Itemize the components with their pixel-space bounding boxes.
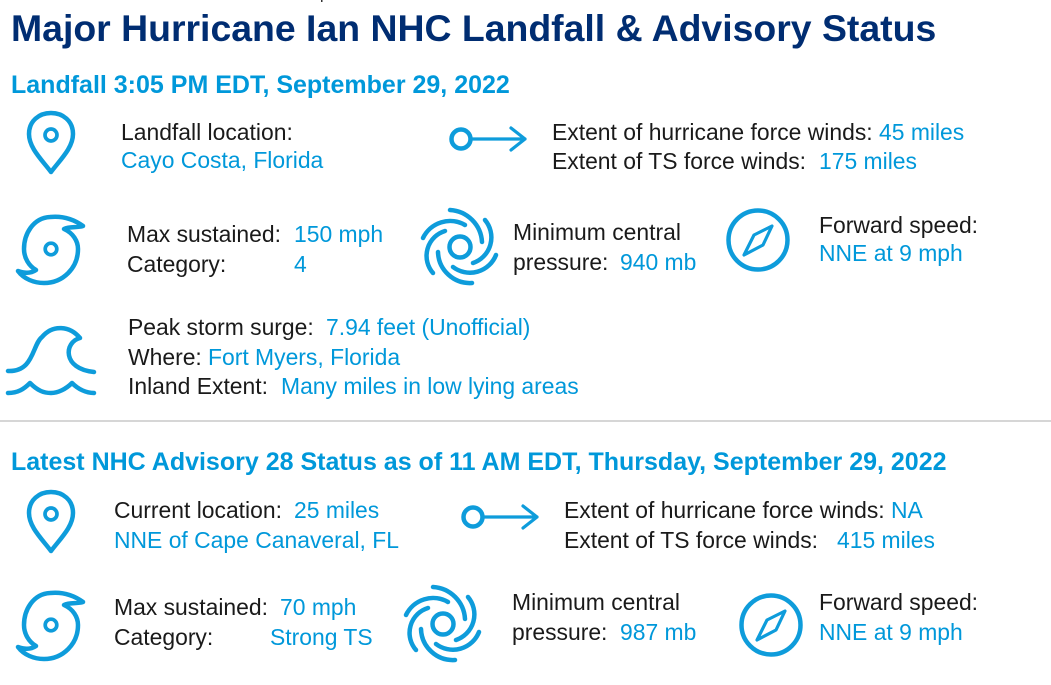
heading: landfall time: Landfall 3:05 PM EDT, September 29, 2022: [11, 71, 510, 99]
text: wind extents: Extent of hurricane force winds:: [552, 119, 873, 145]
text: current location: [114, 497, 399, 553]
text: forward speed: Forward speed:: [819, 212, 978, 238]
text: storm surge: [128, 314, 579, 399]
text: minimum central pressure: pressure:: [513, 249, 608, 275]
heading: advisory status: Latest NHC Advisory 28 Status as of 11 AM EDT, Thursday, September 29, 2022: [11, 448, 947, 476]
icon: storm surge wave: [8, 328, 94, 393]
text: minimum central pressure: Minimum central: [512, 589, 680, 615]
text: forward speed: NNE at 9 mph: [819, 240, 963, 266]
text: wind extents: Extent of TS force winds:: [564, 527, 818, 553]
text: wind extents: [552, 119, 964, 174]
text: current location: NNE of Cape Canaveral, FL: [114, 527, 399, 553]
text: forward speed: Forward speed:: [819, 589, 978, 615]
text: wind extents: NA: [891, 497, 924, 523]
text: wind extents: Extent of TS force winds:: [552, 148, 806, 174]
text: wind extents: 175 miles: [819, 148, 917, 174]
text: minimum central pressure: [512, 589, 696, 645]
text: storm surge: Peak storm surge:: [128, 314, 314, 340]
text: max sustained and category: [114, 594, 373, 650]
text: storm surge: Fort Myers, Florida: [208, 344, 400, 370]
panel: landfall: [8, 71, 978, 399]
text: max sustained and category: Strong TS: [270, 624, 373, 650]
icon: hurricane: [18, 217, 83, 283]
text: minimum central pressure: 987 mb: [620, 619, 696, 645]
text: max sustained and category: Max sustained:: [114, 594, 268, 620]
text: max sustained and category: 150 mph: [294, 221, 383, 247]
text: max sustained and category: Category:: [114, 624, 213, 650]
text: wind extents: Extent of hurricane force winds:: [564, 497, 885, 523]
icon: wind extent arrow: [464, 506, 537, 528]
icon: compass: [728, 210, 788, 270]
text: forward speed: [819, 589, 978, 645]
text: max sustained and category: 4: [294, 251, 307, 277]
text: forward speed: [819, 212, 978, 266]
text: wind extents: [564, 497, 935, 553]
text: minimum central pressure: pressure:: [512, 619, 607, 645]
icon: pressure swirl: [406, 587, 479, 660]
text: minimum central pressure: [513, 219, 696, 275]
text: max sustained and category: Category:: [127, 251, 226, 277]
text: storm surge: Inland Extent:: [128, 373, 268, 399]
text: storm surge: 7.94 feet (Unofficial): [326, 314, 530, 340]
text: current location: Current location:: [114, 497, 282, 523]
panel: latest advisory: [11, 448, 978, 660]
icon: wind extent arrow: [452, 128, 525, 150]
text: wind extents: 45 miles: [879, 119, 964, 145]
icon: location pin: [29, 492, 73, 551]
text: current location: 25 miles: [294, 497, 379, 523]
text: landfall location: [121, 119, 324, 173]
text: wind extents: 415 miles: [837, 527, 935, 553]
text: storm surge: Many miles in low lying areas: [281, 373, 579, 399]
text: minimum central pressure: Minimum central: [513, 219, 681, 245]
text: max sustained and category: 70 mph: [280, 594, 356, 620]
text: max sustained and category: [127, 221, 383, 277]
text: landfall location: Cayo Costa, Florida: [121, 147, 324, 173]
title: Major Hurricane Ian NHC Landfall & Advisory Status: [11, 7, 936, 49]
icon: location pin: [29, 113, 73, 172]
text: landfall location: Landfall location:: [121, 119, 293, 145]
text: storm surge: Where:: [128, 344, 202, 370]
text: minimum central pressure: 940 mb: [620, 249, 696, 275]
icon: pressure swirl: [423, 210, 496, 283]
text: forward speed: NNE at 9 mph: [819, 619, 963, 645]
icon: compass: [742, 596, 800, 654]
icon: hurricane: [18, 593, 83, 659]
text: max sustained and category: Max sustained:: [127, 221, 281, 247]
